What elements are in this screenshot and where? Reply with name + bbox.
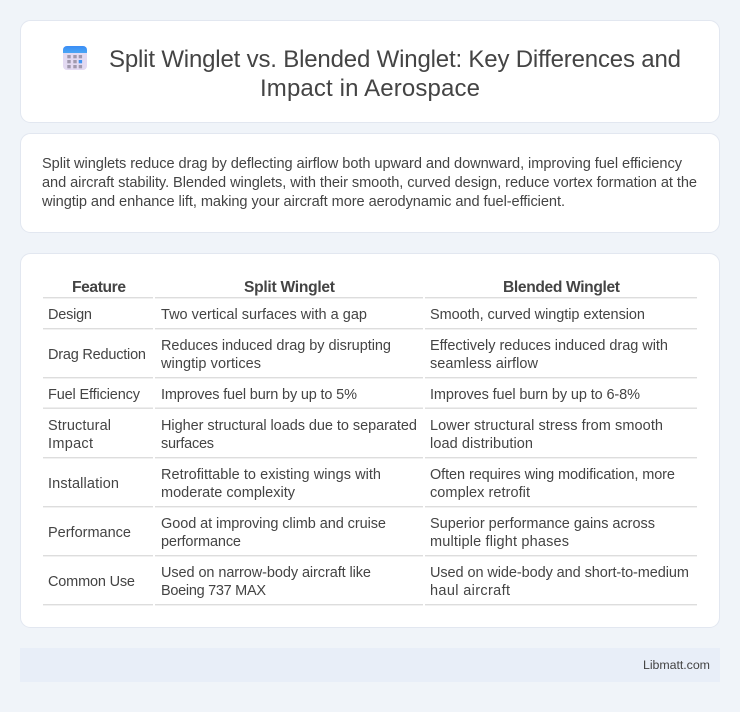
intro paragraph: wingtip and enhance lift, making your aircraft more aerodynamic and fuel-efficient. xyxy=(41,194,565,210)
row: drag reduction: Drag Reduction xyxy=(48,347,146,363)
panel: intro text card xyxy=(20,134,720,232)
row: performance: performance xyxy=(161,534,241,550)
row: performance: multiple flight phases xyxy=(430,534,569,550)
intro paragraph: Split winglets reduce drag by deflecting airflow both upward and downward, improving fuel efficiency xyxy=(42,156,683,172)
row: common use xyxy=(48,565,689,599)
row: structural impact: Structural xyxy=(48,418,111,434)
row: structural impact: Higher structural loads due to separated xyxy=(161,418,417,434)
row: structural impact: surfaces xyxy=(161,436,214,452)
row: installation xyxy=(48,467,675,501)
row: design: Design xyxy=(48,307,92,323)
row: common use: Common Use xyxy=(48,574,135,590)
panel: comparison table card xyxy=(20,254,720,628)
title: Impact in Aerospace xyxy=(260,75,480,102)
row: drag reduction: Reduces induced drag by disrupting xyxy=(161,338,391,354)
table header row: Feature xyxy=(72,279,126,296)
row: fuel efficiency: Improves fuel burn by up to 6-8% xyxy=(430,387,640,403)
title: Split Winglet vs. Blended Winglet: Key Differences and xyxy=(109,46,681,73)
table header row xyxy=(72,279,620,296)
table header row: Split Winglet xyxy=(244,279,335,296)
row: common use: haul aircraft xyxy=(430,583,510,599)
row: design: Two vertical surfaces with a gap xyxy=(161,307,367,323)
table header row: Blended Winglet xyxy=(503,279,620,296)
row: drag reduction: Effectively reduces induced drag with xyxy=(430,338,668,354)
icon: calendar xyxy=(63,46,87,70)
row: installation: moderate complexity xyxy=(161,485,296,501)
row: structural impact: load distribution xyxy=(430,436,533,452)
row: drag reduction xyxy=(48,338,668,372)
panel: header card xyxy=(20,20,720,122)
footer bar xyxy=(20,648,720,682)
row: fuel efficiency: Improves fuel burn by up to 5% xyxy=(161,387,357,403)
row: drag reduction: wingtip vortices xyxy=(160,356,261,372)
row: fuel efficiency: Fuel Efficiency xyxy=(48,387,141,403)
row: structural impact: Lower structural stress from smooth xyxy=(430,418,663,434)
row: performance xyxy=(48,516,655,550)
footer credit: Libmatt.com xyxy=(643,658,710,672)
row: drag reduction: seamless airflow xyxy=(430,356,539,372)
row: installation: Retrofittable to existing wings with xyxy=(161,467,381,483)
row: structural impact xyxy=(48,418,663,452)
row: performance: Performance xyxy=(48,525,131,541)
row: design xyxy=(48,307,645,323)
row: installation: Installation xyxy=(48,476,119,492)
row: common use: Used on narrow-body aircraft like xyxy=(161,565,371,581)
title xyxy=(109,46,681,102)
row: common use: Boeing 737 MAX xyxy=(161,583,266,599)
intro paragraph xyxy=(41,156,697,210)
row: design: Smooth, curved wingtip extension xyxy=(430,307,645,323)
row: common use: Used on wide-body and short-to-medium xyxy=(430,565,689,581)
row: structural impact: Impact xyxy=(48,436,93,452)
row: installation: Often requires wing modification, more xyxy=(430,467,675,483)
intro paragraph: and aircraft stability. Blended winglets, with their smooth, curved design, reduce vortex formation at the xyxy=(42,175,697,191)
row: performance: Superior performance gains across xyxy=(430,516,655,532)
row: performance: Good at improving climb and cruise xyxy=(161,516,386,532)
row: fuel efficiency xyxy=(48,387,640,403)
row: installation: complex retrofit xyxy=(430,485,530,501)
